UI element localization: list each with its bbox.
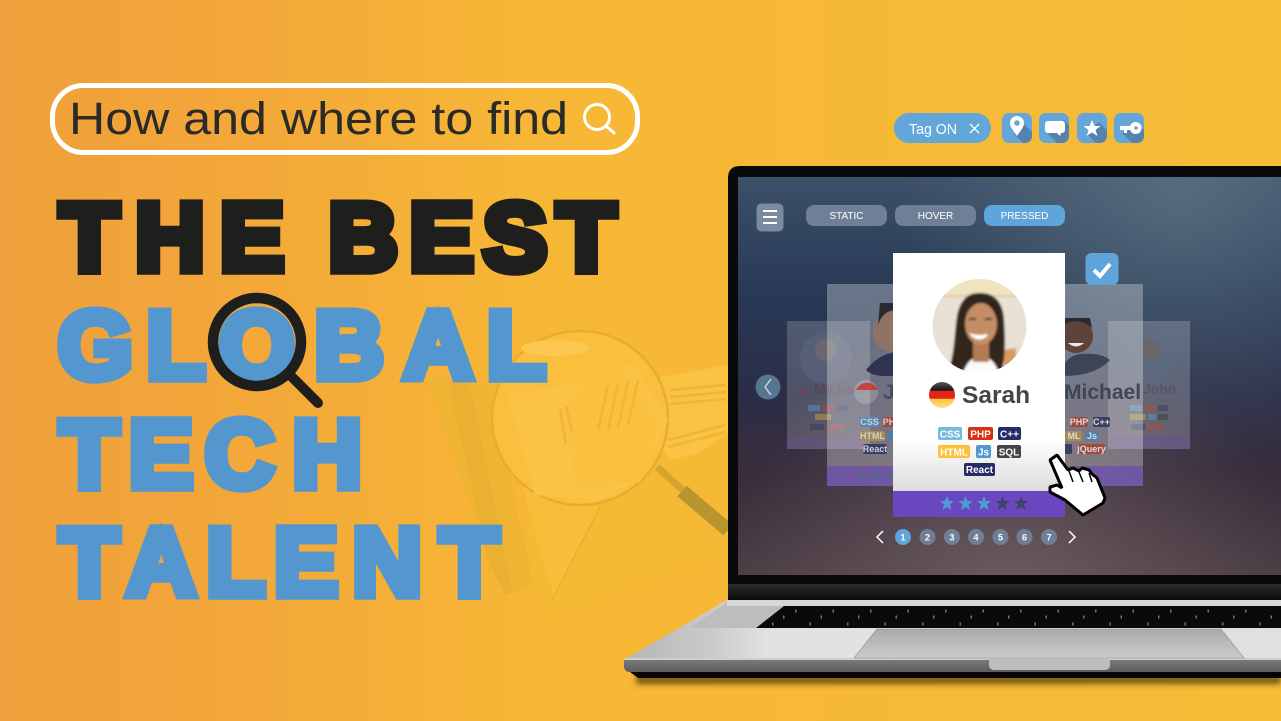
laptop shadow [630, 672, 1281, 684]
back right card: Michael: PHP [1070, 417, 1088, 427]
icon: left arrow button [756, 374, 780, 400]
rating bar [893, 491, 1065, 517]
pagination: 1 [900, 532, 906, 542]
notch [989, 659, 1110, 670]
far-back right card: John [1143, 381, 1176, 397]
icon: check badge [1086, 253, 1118, 285]
arrow: previous [877, 531, 883, 543]
far-back right card [1108, 321, 1190, 449]
skill tags: React [966, 465, 994, 476]
back left card: J: React [863, 444, 887, 454]
tag row [894, 113, 1144, 143]
rating stars [940, 496, 1028, 510]
far-back left card: •l• [798, 386, 808, 397]
pagination [877, 529, 1075, 545]
far-back left card [787, 321, 870, 449]
back left card: J: PH [883, 417, 895, 427]
back left card: J [827, 284, 967, 486]
skill tags: HTML [940, 448, 968, 458]
skill tags: SQL [999, 448, 1019, 458]
pagination: 4 [973, 532, 979, 542]
back right card: Michael: Js [1087, 431, 1097, 441]
button: pressed [984, 205, 1065, 226]
search box heading: How and where to find [69, 93, 568, 144]
pagination: 7 [1046, 532, 1052, 542]
laptop [624, 166, 1281, 684]
back right card: Michael [1040, 284, 1143, 486]
background photo: book and magnifying glass [428, 331, 728, 620]
button: static: STATIC [829, 211, 864, 222]
skill tags: PHP [970, 430, 991, 440]
skill tags: CSS [940, 430, 961, 440]
icon: magnifier [213, 298, 318, 403]
back left card: J: J [883, 381, 895, 404]
icon: hand cursor [1050, 455, 1105, 515]
trackpad [854, 629, 1244, 658]
button: static [806, 205, 887, 226]
main card: Sarah [893, 253, 1065, 517]
title: THE BEST: THE BEST [60, 184, 616, 291]
back left card: J: HTML [860, 431, 885, 441]
arrow: next [1069, 531, 1075, 543]
icon: search [584, 104, 614, 133]
icon: location pin [1002, 113, 1032, 143]
button: pressed: PRESSED [1001, 211, 1048, 222]
laptop base [624, 600, 1281, 672]
name: Sarah [962, 382, 1030, 409]
pagination: 2 [925, 532, 930, 542]
search box heading [52, 86, 638, 152]
pagination: 6 [1022, 532, 1027, 542]
photo [932, 279, 1026, 370]
screen [738, 177, 1281, 575]
title: GLOBAL with magnifier: GLOBAL [58, 292, 546, 399]
tag pill [894, 113, 991, 143]
title: TECH: TECH [60, 401, 362, 508]
menu button [756, 204, 784, 232]
skill tags [938, 427, 1021, 476]
button: hover: HOVER [918, 211, 953, 222]
tag pill: Tag ON [909, 121, 957, 138]
icon: star [1077, 113, 1107, 143]
back right card: Michael: jQuery [1076, 444, 1106, 454]
state buttons [806, 205, 1065, 226]
title: TALENT: TALENT [60, 509, 499, 616]
button: hover [895, 205, 976, 226]
skill tags: Js [978, 448, 989, 458]
flag: Germany [929, 382, 955, 408]
far-back left card: Michael [814, 381, 865, 397]
pagination: 3 [949, 532, 955, 542]
pagination: 5 [998, 532, 1003, 542]
back left card: J: CSS [860, 417, 879, 427]
back right card: Michael: Michael [1064, 381, 1141, 404]
icon: key [1114, 113, 1144, 143]
laptop lid [728, 166, 1281, 600]
keyboard [756, 606, 1281, 628]
back right card: Michael: C++ [1093, 417, 1110, 427]
skill tags: C++ [1000, 430, 1019, 440]
icon: speech bubble [1039, 113, 1069, 143]
back right card: Michael: ML [1068, 431, 1081, 441]
